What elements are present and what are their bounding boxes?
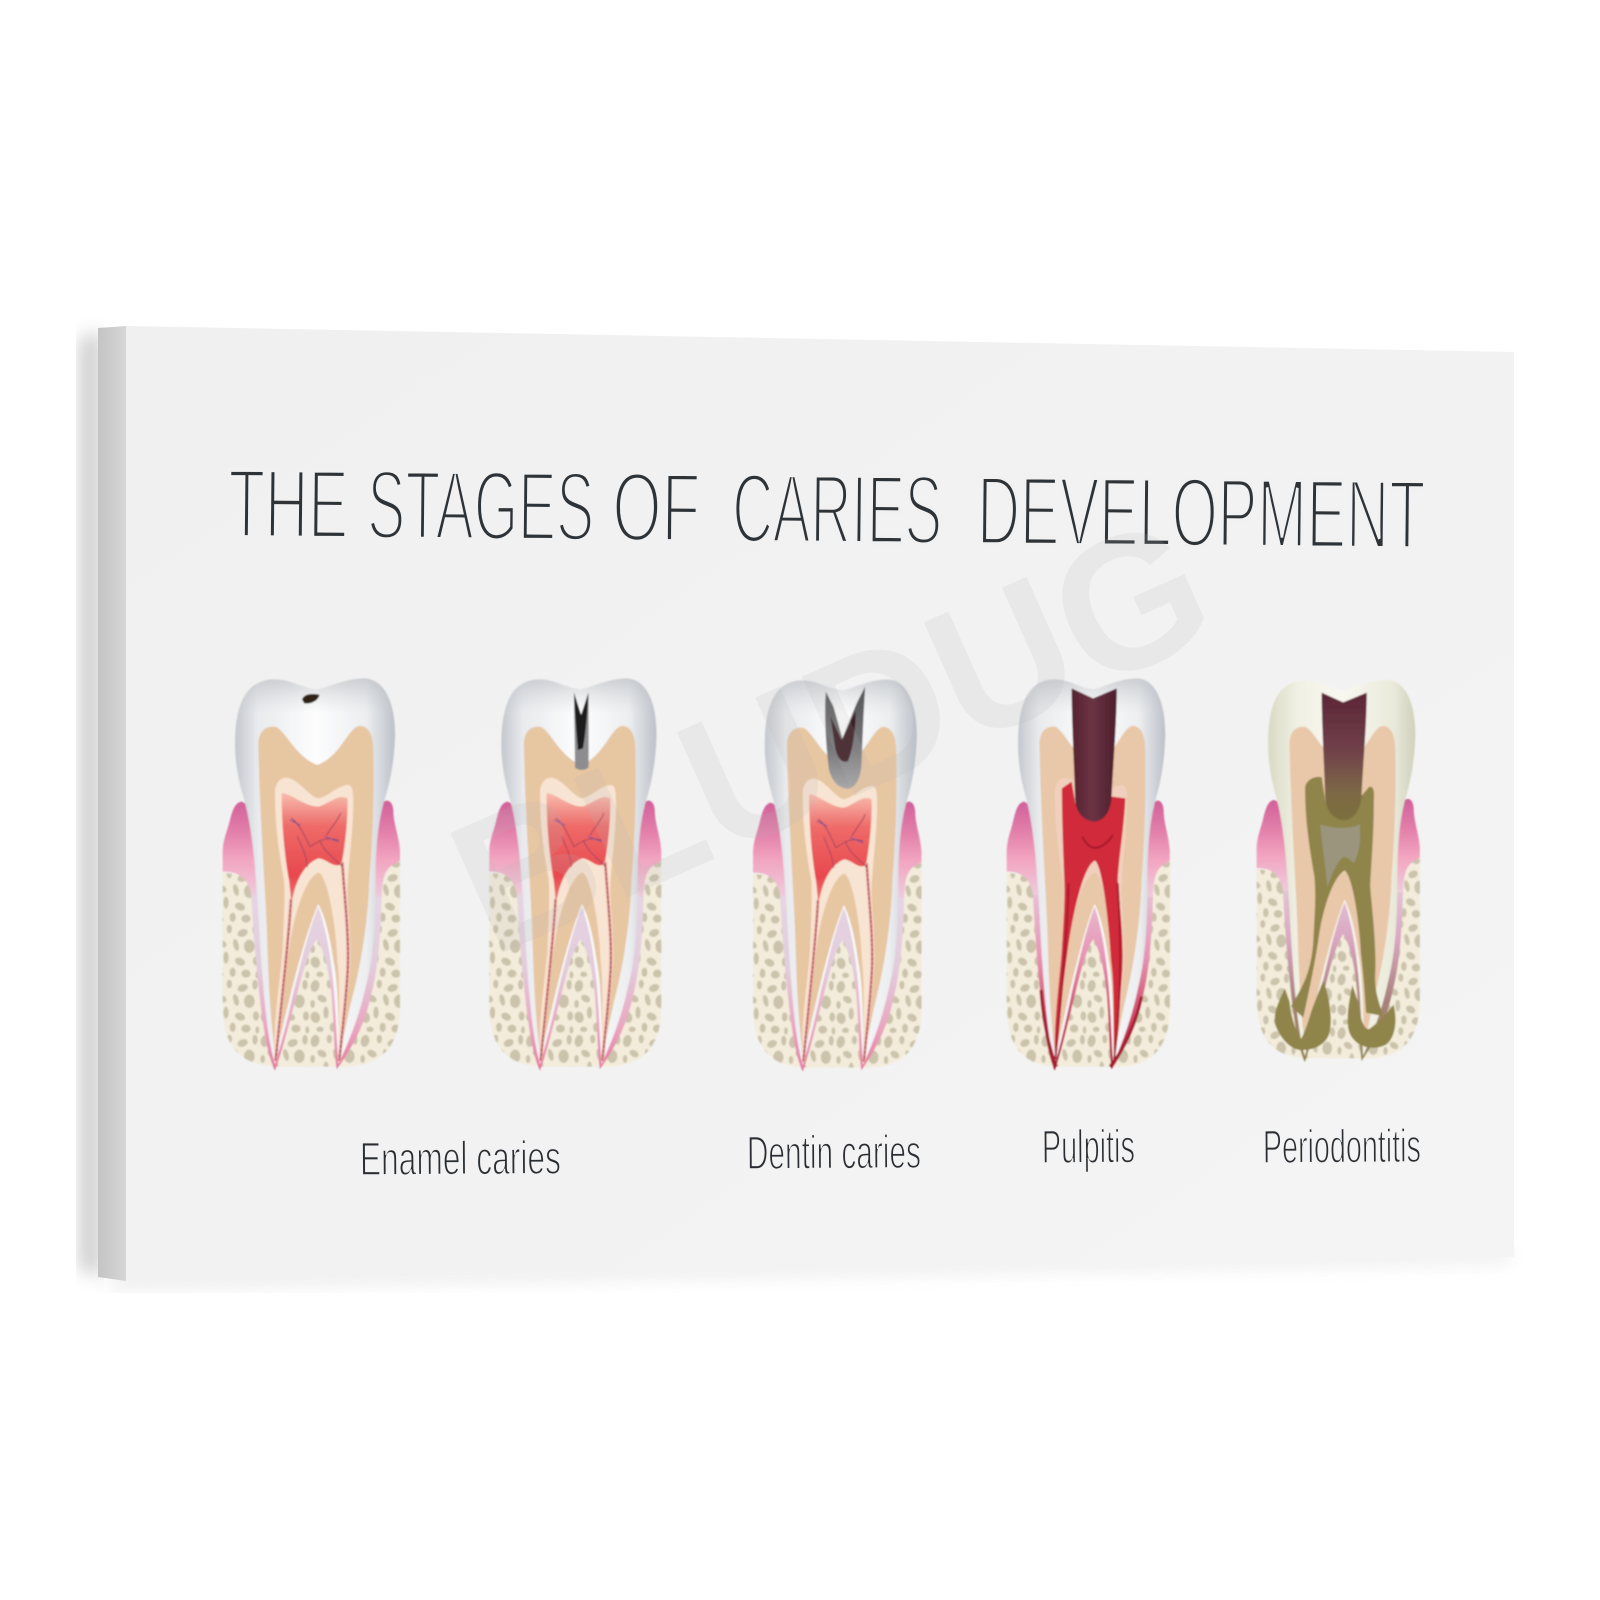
icon: drilled shaft	[1072, 688, 1117, 822]
label: Dentin caries: Dentin caries	[747, 1125, 921, 1179]
label: Periodontitis: Periodontitis	[1263, 1119, 1421, 1173]
watermark: BLUDUG	[423, 476, 1240, 995]
canvas side edge	[98, 326, 126, 1281]
tooth 4: pulpitis	[1007, 678, 1170, 1071]
icon: dentin cavity	[825, 687, 865, 789]
infected pulp	[1291, 777, 1383, 1018]
title: CARIES	[732, 453, 943, 565]
title	[228, 448, 1426, 569]
canvas shadow	[80, 330, 1510, 1286]
label: Pulpitis: Pulpitis	[1042, 1119, 1135, 1173]
icon: enamel cavity	[574, 693, 589, 770]
tooth 2	[489, 678, 661, 1071]
abscess	[1275, 980, 1331, 1050]
canvas front panel	[126, 326, 1514, 1281]
tooth 5: periodontitis	[1257, 680, 1420, 1062]
inflamed pulp	[1055, 782, 1125, 1059]
title: OF	[612, 452, 701, 563]
icon: drilled shaft	[1322, 693, 1367, 820]
icon: caries spot	[302, 694, 319, 704]
tooth 1: enamel caries	[223, 678, 400, 1071]
title: STAGES	[367, 449, 595, 561]
tooth 3: dentin caries	[753, 679, 922, 1072]
label: Enamel caries: Enamel caries	[360, 1131, 561, 1185]
title: THE	[228, 448, 349, 559]
